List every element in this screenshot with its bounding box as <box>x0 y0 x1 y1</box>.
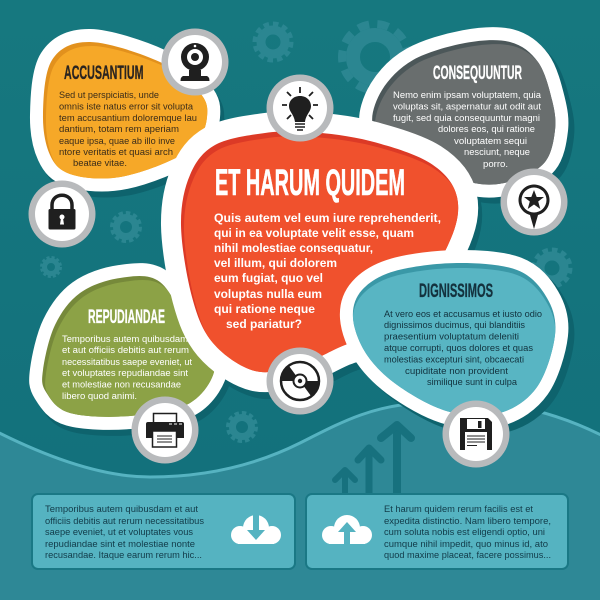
text: dignissimos: At vero eos et accusamus et iusto odio <box>384 309 542 319</box>
text: repudiandae: et voluptates repudiandae sint <box>62 368 189 378</box>
gears decoration <box>42 24 570 441</box>
text: left box: Temporibus autem quibusdam et aut <box>45 504 199 514</box>
text: left box: repudiandae sint et molestiae nonte <box>45 539 195 549</box>
text: et harum quidem: vel illum, qui dolorem <box>214 257 337 270</box>
text: accusantium: Sed ut perspiciatis, unde <box>59 90 159 100</box>
text: consequuntur: Nemo enim ipsam voluptatem, quia <box>393 90 541 100</box>
icon: cloud download <box>231 515 281 544</box>
text: et harum quidem <box>214 212 441 331</box>
text: consequuntur: voluptas sit, aspernatur aut odit aut <box>393 102 542 112</box>
text: consequuntur: fugit, sed quia consequuntur magni <box>393 113 540 123</box>
text: repudiandae: et molestiae non recusandae <box>62 380 181 390</box>
text: et harum quidem: nihil molestiae consequatur, <box>214 242 373 255</box>
icon: cloud upload <box>322 515 372 544</box>
text: consequuntur: dolores eos, qui ratione <box>438 124 535 134</box>
text: consequuntur: nesciunt, neque <box>464 147 530 157</box>
text: right box <box>384 504 551 560</box>
icon: map pin star <box>500 168 568 236</box>
text: accusantium: dantium, totam rem aperiam <box>59 124 179 134</box>
arrow large <box>381 425 411 493</box>
panel: consequuntur <box>372 40 558 189</box>
text: et harum quidem: qui ratione neque <box>214 303 316 316</box>
text: et harum quidem: eum fugiat, quo vel <box>214 272 323 285</box>
icon: webcam <box>162 28 228 96</box>
text: dignissimos: cupiditate non provident <box>405 366 509 376</box>
text: et harum quidem: sed pariatur? <box>226 318 302 331</box>
text: dignissimos <box>384 309 542 387</box>
text: consequuntur: voluptatem sequi <box>454 136 527 146</box>
icon: floppy disk <box>442 400 510 468</box>
text: left box: recusandae. Itaque earum rerum hic... <box>45 550 202 560</box>
text: dignissimos: similique sunt in culpa <box>427 377 517 387</box>
text: repudiandae: libero quod animi. <box>62 391 137 401</box>
text: accusantium: omnis iste natus error sit volupta <box>59 102 193 112</box>
icon: compact disc <box>266 348 334 414</box>
text: dignissimos: molestias excepturi sint, obcaecati <box>384 354 524 364</box>
heading: repudiandae: REPUDIANDAE <box>88 307 165 328</box>
text: right box: expedita distinctio. Nam libero tempore, <box>384 516 551 526</box>
gear left middle <box>112 213 140 241</box>
text: left box: officiis debitis aut rerum necessitatibus <box>45 516 205 526</box>
info box: left <box>32 494 295 569</box>
text: dignissimos: dignissimos ducimus, qui blanditiis <box>384 320 526 330</box>
text: consequuntur: porro. <box>483 159 508 169</box>
text: accusantium <box>59 90 197 168</box>
icon: printer <box>132 396 198 464</box>
heading: dignissimos: DIGNISSIMOS <box>419 281 493 302</box>
text: repudiandae <box>62 334 193 401</box>
text: et harum quidem: voluptas nulla eum <box>214 288 322 301</box>
arrow small <box>335 470 355 493</box>
icon: light bulb <box>266 74 334 142</box>
panel: repudiandae <box>42 276 218 421</box>
info box: right <box>306 494 568 569</box>
text: accusantium: tem accusantium doloremque lau <box>59 113 197 123</box>
arrow medium <box>358 448 381 493</box>
text: left box <box>45 504 205 560</box>
text: consequuntur <box>393 90 542 169</box>
blob shadows <box>46 46 561 423</box>
text: right box: cumque nihil impedit, quo minus id, ato <box>384 539 548 549</box>
text: right box: Et harum quidem rerum facilis est et <box>384 504 534 514</box>
panel: et harum quidem <box>181 131 461 377</box>
panel: accusantium <box>43 42 210 183</box>
text: dignissimos: praesentium voluptatum deleniti <box>384 332 519 342</box>
text: right box: cum soluta nobis est eligendi optio, uni <box>384 527 545 537</box>
text: et harum quidem: Quis autem vel eum iure reprehenderit, <box>214 212 441 225</box>
heading: accusantium: ACCUSANTIUM <box>64 63 144 84</box>
gear small top <box>255 24 291 60</box>
gear right <box>534 250 570 286</box>
heading: consequuntur: CONSEQUUNTUR <box>433 63 522 84</box>
heading: et harum quidem: ET HARUM QUIDEM <box>215 162 405 203</box>
growth arrows <box>335 425 411 493</box>
text: right box: quod maxime placeat, facere possimus... <box>384 550 551 560</box>
text: accusantium: beatae vitae. <box>73 158 127 168</box>
text: accusantium: eaque ipsa, quae ab illo inve <box>59 136 175 146</box>
text: repudiandae: Temporibus autem quibusdam <box>62 334 188 344</box>
icon: padlock <box>28 180 96 248</box>
text: et harum quidem: qui in ea voluptate velit esse, quam <box>214 227 414 240</box>
text: repudiandae: necessitatibus saepe eveniet, ut <box>62 357 193 367</box>
gear left small <box>42 258 60 276</box>
gear large top <box>342 24 408 90</box>
hill background <box>0 402 600 600</box>
text: repudiandae: et aut officiis debitis aut rerum <box>62 345 189 355</box>
text: accusantium: ntore veritatis et quasi arch <box>59 147 173 157</box>
text: left box: saepe eveniet, ut et voluptates vous <box>45 527 194 537</box>
text: dignissimos: atque corrupti, quos dolores et quas <box>384 343 534 353</box>
panel: dignissimos <box>353 263 555 421</box>
gear lower <box>228 413 256 441</box>
